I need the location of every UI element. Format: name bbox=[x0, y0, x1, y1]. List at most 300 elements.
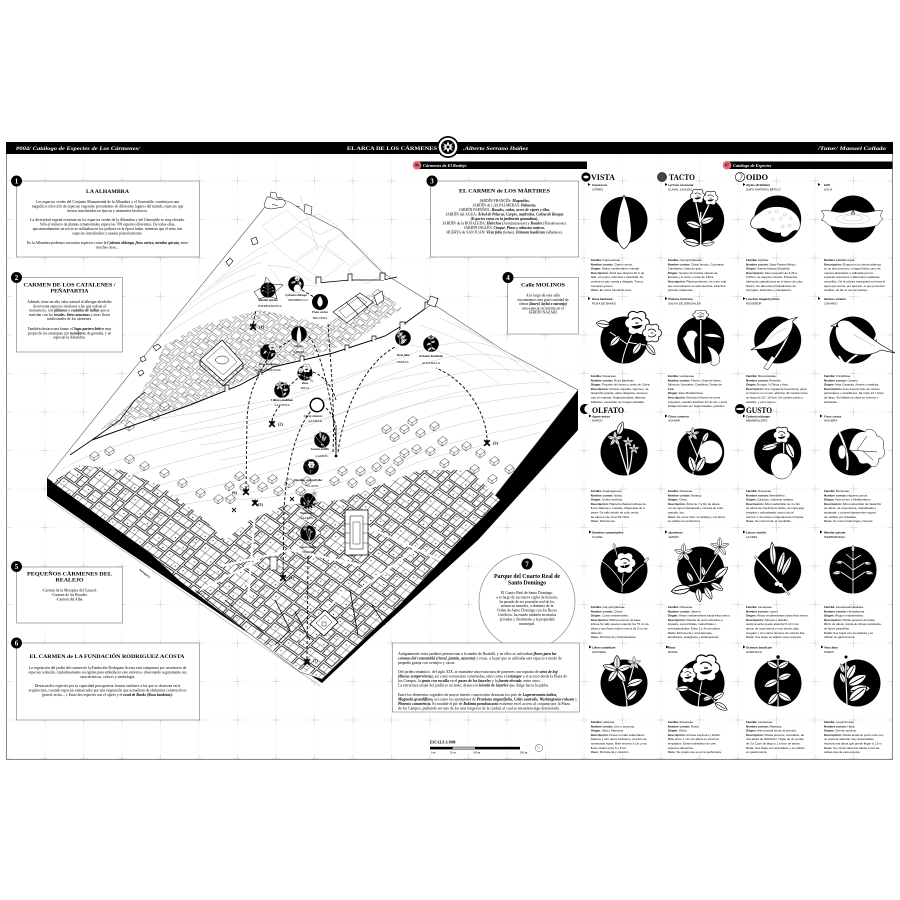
map location markers: (2) bbox=[278, 422, 283, 426]
species card: Agave amica: Nombre común: Nardo. bbox=[591, 493, 623, 497]
species card: Lilium candidum: Usos: Perfumería y curación. bbox=[591, 750, 629, 754]
panel 5: Pequeños cármenes del Realejo: PEQUEÑOS CÁRMENES DEL bbox=[27, 570, 113, 578]
species card: Rosa: especies diferentes. bbox=[668, 746, 694, 750]
species card: Agave amica: flores blancas o rosadas, dispuestas de a bbox=[591, 506, 645, 510]
species card: Rosa banksiae bbox=[588, 297, 661, 404]
panel 4: Calle Molinos: JARDÍN NAZARÍ. bbox=[528, 310, 558, 315]
map species labels: LAUREL bbox=[315, 454, 329, 458]
species card: Agave amica bbox=[589, 414, 648, 523]
species card: Rosa: Nombre común: Rosal. bbox=[668, 724, 700, 728]
landmark buildings in the Realejo bbox=[270, 510, 368, 636]
scale bar: ESCALA 1:1000 bbox=[430, 740, 456, 744]
species card: Mentha spicata: de flores pequeñas. bbox=[824, 626, 850, 630]
map species labels: Dianthus caryophyllus bbox=[293, 478, 323, 482]
panel 1: La Alhambra bbox=[11, 176, 200, 257]
species card: Lilium candidum bbox=[589, 646, 648, 754]
panel 4: Calle Molinos bbox=[502, 272, 579, 334]
species card: Lychnis coronaria: Origen: Género de hierbas nativas de bbox=[668, 271, 718, 275]
heading: Gusto bbox=[735, 404, 772, 415]
species card: Ficus carica bbox=[820, 414, 885, 523]
species card: Luscinia megarhynchos: el invierno en el cent. africano. El ruiseñor tiene bbox=[746, 391, 808, 395]
map species labels: Cydonia oblonga bbox=[285, 293, 307, 297]
species card: Cydonia oblonga: retorcer y de ramas en ligeramente tortuosa. bbox=[746, 515, 804, 519]
panel 3: El Carmen de los Mártires: JARDÍN de LAS PALMERAS: Palmeras. bbox=[473, 202, 537, 208]
heading: Oido bbox=[735, 172, 768, 182]
species card: Serinus canaria: Familia: Fringillidae. bbox=[824, 374, 851, 378]
species card: Alytes dickhilleni: Nombre común: Sapo Partero Bético. bbox=[746, 262, 797, 266]
tutor: /Tutor/ Manuel Collado bbox=[817, 146, 886, 152]
species card: Ficus carica: Usos: Se come frutas higos y brevas. bbox=[824, 519, 873, 523]
heading: Oido: OIDO bbox=[746, 172, 768, 182]
species card: Laurus nobilis: Familia: Lauraceae. bbox=[746, 605, 773, 609]
species card: Serinus canaria: de largo. Su hábitat se ubica en huertos y bbox=[824, 396, 879, 400]
icon: hierbabuena bbox=[254, 277, 283, 299]
map species labels: NARDO bbox=[302, 550, 314, 554]
panel 1: La Alhambra: La diversidad vegetal existente en los espacios verdes de la Alhambra y del Generalife es muy elevada. bbox=[30, 218, 185, 222]
species card: Cupressus: Nombre común: Ciprés común. bbox=[591, 262, 633, 266]
panel 2: Carmen de los Catalenes: monasterio, con plátanos o castaños de indias que se bbox=[29, 309, 110, 314]
text panel: history of the gardens: Phoenix canariensis. Es notable el pie de Robinia pseudoacacia existente en el acceso al conjunto por la Plaza bbox=[398, 702, 570, 706]
species card: Rosa: Descripción: Arbusto espinoso y florido. bbox=[668, 733, 721, 737]
species card: Cydonia oblonga: Usos: Se come fruta: el membrillo. bbox=[746, 519, 792, 523]
species card: Rosa: Familia: Rosaceae. bbox=[668, 720, 694, 724]
species card: Cupressus: Origen: Nativo mediterráneo oriental. bbox=[591, 267, 640, 271]
species card: Rosa banksiae: Origen: Procede del centro y oeste de China. bbox=[591, 383, 650, 387]
panel 2: Carmen de los Catalenes: 2 bbox=[15, 274, 19, 282]
panel 5: Pequeños cármenes del Realejo: -Carmen de los Rosales. bbox=[51, 593, 88, 597]
species card: Cupressus: Cupressus bbox=[592, 183, 608, 187]
species card: Ficus carica: achatada, y corteza ligeramente rugosa bbox=[824, 510, 876, 514]
species card: Citrus sinensis bbox=[665, 414, 726, 523]
species card: Agave amica: NARDO bbox=[592, 418, 603, 422]
species card: Jasminum: Familia: Oleaceae. bbox=[668, 605, 693, 609]
species card: Serinus canaria: arboledas. bbox=[824, 400, 838, 404]
icon: azucena bbox=[274, 381, 290, 399]
species card: Phlomis fruticosa: Nombre común: Flomis, Oreja de liebre, bbox=[668, 378, 722, 382]
panel 6: Fundación Rodríguez Acosta: especies reducido, cuidadosamente escogidas para embellecer este universo, observando seguramente sus bbox=[28, 670, 187, 676]
species card: Citrus sinensis: con la copa redondeada y corteza de color bbox=[668, 506, 723, 510]
species card: H2O water: agua que suena, por ejemplo, el que provocan bbox=[824, 284, 885, 288]
map species labels: Agave amica bbox=[299, 545, 317, 549]
species card: Jasminum bbox=[665, 530, 731, 639]
species card: Phlomis fruticosa bbox=[665, 297, 728, 408]
map species labels: MEMBRILLO bbox=[288, 298, 309, 302]
species card: Ocimum basilicum: Origen: Asia tropical (zona de persas). bbox=[746, 729, 797, 733]
species card: Cupressus: CIPRÉS bbox=[592, 186, 603, 191]
map surface bbox=[47, 197, 578, 679]
species card: Phlomis fruticosa: SALVIA DE JERUSALÉN bbox=[668, 300, 701, 306]
map species labels bbox=[255, 293, 444, 554]
species card: Cydonia oblonga bbox=[743, 414, 804, 523]
species card: Cydonia oblonga: Origen: Cáucaso, sudoeste asiático. bbox=[746, 498, 794, 502]
author: .Alberto Serrano Ibáñez bbox=[463, 146, 529, 152]
species card: Vicia faba bbox=[821, 646, 884, 754]
species card: Ocimum basilicum: Familia: Lamiaceae. bbox=[746, 720, 773, 724]
species card: Vicia faba: Familia: Leguminosae. bbox=[824, 720, 855, 724]
species card: Cydonia oblonga: de altura de crecimiento tardío, de copa algo bbox=[746, 506, 804, 510]
species card: Cupressus: Usos: En setos formando seos. bbox=[591, 288, 632, 292]
species card: Laurus nobilis bbox=[743, 530, 809, 639]
map species labels: Vicia faba bbox=[397, 353, 410, 357]
map location markers: (7) bbox=[313, 658, 318, 663]
species card: Serinus canaria: Origen: Islas Canarias, Azores y madeira. bbox=[824, 383, 879, 387]
scattered houses bbox=[90, 402, 514, 504]
species card: Rosa banksiae: Familia: Rosaceae. bbox=[591, 374, 617, 378]
species card: Rosa: Rosa bbox=[668, 646, 676, 650]
species card: Lychnis coronaria: Familia: Caryophyllaceae. bbox=[668, 258, 703, 262]
icon: azahar bbox=[310, 398, 324, 412]
text panel: history of the gardens: Del jardín romántico, del siglo XIX, se mantiene una estructura de parterres con topiaria de setos de boj bbox=[398, 670, 559, 675]
species card: Jasminum: semicaducifolias. Entre 2 y 4m de altura. bbox=[668, 626, 721, 630]
species card: Lilium candidum: Lilium candidum bbox=[592, 646, 616, 650]
panel 2: Carmen de los Catalenes: PEÑAPARTIA bbox=[50, 286, 89, 294]
species card: Mentha spicata: HIERBABUENA bbox=[824, 535, 845, 539]
map species labels: Cipres. bbox=[294, 344, 304, 348]
panel 1: La Alhambra: Los espacios verdes del Conjunto Monumental de la Alhambra y el Generalife, constituyen una bbox=[36, 200, 179, 205]
panel 2: Carmen de los Catalenes: CARMEN DE LOS CATALENES / bbox=[24, 282, 116, 288]
species card: Mentha spicata: Nombre común: Hierbabuena. bbox=[824, 609, 865, 613]
species card: Citrus sinensis: Usos: Se come fruto: la naranja y sus flores bbox=[668, 515, 726, 519]
panel 6: Fundación Rodríguez Acosta: características, colores y simbología. bbox=[80, 675, 135, 680]
panel 3: El Carmen de los Mártires: HUERTA de SAN JUAN: Vicia faba (habas), Ocimum basilicum (albahaca). bbox=[446, 230, 563, 236]
species card: Cupressus bbox=[588, 183, 648, 292]
species card: Mentha spicata: Mentha spicata bbox=[824, 530, 846, 534]
species card: Mentha spicata: 80cm de altura, propia de climas templados, bbox=[824, 622, 882, 626]
species card: Serinus canaria: Nombre común: Canario. bbox=[824, 378, 859, 382]
species card: Cydonia oblonga: Descripción: Árbol caducifolio de 4 a 6m bbox=[746, 502, 801, 506]
species card: Alytes dickhilleni: Descripción: Sapo pequeño de 3,26 a bbox=[746, 271, 797, 275]
species card: Rosa: Origen: África. bbox=[668, 729, 687, 733]
panel 5: Pequeños cármenes del Realejo: 5 bbox=[15, 563, 19, 571]
species card: Rosa banksiae: Rosa banksiae bbox=[592, 297, 613, 301]
Generalife buildings texture bbox=[326, 288, 402, 346]
species card: Phlomis fruticosa: Descripción: Arbustos leñosos de porte bbox=[668, 396, 721, 400]
species card: Alytes dickhilleni: Origen: Sierras béticas (España). bbox=[746, 267, 790, 271]
species card: Cupressus: talla, con porte columnar o piramidal. Su bbox=[591, 275, 644, 279]
species card: Ficus carica: de múltiple por rebutada. bbox=[824, 515, 857, 519]
map: axonometric view of the Alhambra and Realejo bbox=[47, 192, 578, 686]
species card: Jasminum: JAZMÍN bbox=[668, 535, 679, 539]
species card: Luscinia megarhynchos: Origen: Europa, N.Ofrica y Asia. bbox=[746, 383, 789, 387]
species card: Dianthus caryophyllus: Descripción: Planta perenne de base bbox=[591, 618, 641, 622]
species card: Lychnis coronaria: Descripción: Planta perennes, de corto vida bbox=[668, 280, 727, 284]
panel 6: Fundación Rodríguez Acosta: Destacan dos especies por su capacidad para generar formas similares a las que se observan en la bbox=[35, 684, 181, 688]
species card: Alytes dickhilleni: hormigas, arácnidos y coleópteros. bbox=[746, 288, 792, 292]
species card: Mentha spicata: Origen: Región mediterránea. bbox=[824, 614, 864, 618]
panel 2: Carmen de los Catalenes: propio de los estanques con nenúfares de granada, y en bbox=[28, 331, 111, 336]
Generalife palace bbox=[333, 291, 384, 323]
map species labels: HIGUERA bbox=[313, 316, 328, 320]
species card: Rosa: templados. Existen alrededor de cien bbox=[668, 742, 716, 746]
species card: Ocimum basilicum: ALBAHACA bbox=[746, 650, 762, 654]
panel 1: La Alhambra: muchas otras... bbox=[96, 246, 119, 250]
species card: H2O water: manera abundante y callmada por los bbox=[824, 271, 874, 275]
section bar 06 bbox=[413, 161, 587, 170]
heading: Vista: VISTA bbox=[591, 172, 616, 182]
icon: north arrow bbox=[535, 744, 543, 752]
icon: habas bbox=[395, 329, 411, 347]
species card: Rosa banksiae: Nombre común: Rosa Banksiae. bbox=[591, 378, 635, 382]
species card: Luscinia megarhynchos: un largo de 15 / 16,5cm. De colores pardo y bbox=[746, 396, 804, 400]
panel 7: Parque del Cuarto Real de Santo Domingo: Católicos, ha estado también en manos bbox=[498, 613, 557, 618]
species card: Alytes dickhilleni bbox=[743, 183, 803, 292]
species card: Laurus nobilis: Descripción: Árbusto o árbolito bbox=[746, 618, 788, 622]
species card: Alytes dickhilleni: Familia: Alytidae. bbox=[746, 258, 769, 262]
species card: Rosa: Mide entre 1 / 2m de altura en entornos bbox=[668, 737, 720, 741]
text panel: history of the gardens: coronas del consumirlá (clavel, jazmín, azucena) y rosas, a la par que se utilizaba este espacio a modo de bbox=[398, 656, 562, 662]
text panel: history of the gardens: (Buxus sempervirens), así como estructuras construidas, tales como el estanque o el acceso desde la Plaza de bbox=[398, 674, 567, 680]
black terrain wedges bbox=[47, 390, 578, 683]
species card: Lilium candidum: Origen: Siria y Palestina. bbox=[591, 729, 624, 733]
species card: Ocimum basilicum: en gastronomía. bbox=[746, 750, 767, 754]
species card: Citrus sinensis: Familia: Rutaceae. bbox=[668, 489, 693, 493]
species card: Cupressus: Descripción: Árbol que alcanza 30 m de bbox=[591, 271, 645, 275]
text panel: history of the gardens: Entre los elementos vegetales de mayor interés conservados destacan los pies de Lagerstroemia indica, bbox=[398, 693, 557, 697]
icon: rosa bbox=[297, 364, 314, 382]
species card: Luscinia megarhynchos: RUISEÑOR bbox=[746, 300, 762, 306]
species card: H2O water: sonidos, de ahí el uso de fuentes. bbox=[824, 288, 868, 292]
map species labels: HABAS bbox=[397, 360, 409, 364]
species card: Cydonia oblonga: irregular y redondeada; tronco tort al bbox=[746, 510, 794, 514]
icon: nardo bbox=[296, 522, 321, 543]
panel 7: Parque del Cuarto Real de Santo Domingo: a lo largo de sus nueve siglos de historia, bbox=[496, 595, 558, 600]
icon: laurel bbox=[314, 431, 330, 448]
panel 3: El Carmen de los Mártires: (Especies raras en la jardinería granadina). bbox=[471, 217, 538, 221]
section bar 06: Cármenes de El Realejo bbox=[423, 163, 467, 168]
heading: Olfato: OLFATO bbox=[592, 405, 624, 415]
panel 2: Carmen de los Catalenes: de noventa especies similares a las que rodean el bbox=[33, 304, 106, 308]
species card: Dianthus caryophyllus: Familia: Caryophyllaceae. bbox=[591, 605, 626, 609]
species card: Agave amica: Descripción: Planta herbácea bulbosa de bbox=[591, 502, 646, 506]
text panel: history of the gardens: de los Campos, pudiendo ser uno de los más longevos de la ciudad, el cual se encuentra algo deteriorado. bbox=[398, 706, 560, 712]
species card: Citrus sinensis: Nombre común: Naranjo. bbox=[668, 493, 702, 497]
map species labels: Rosa banksiae bbox=[259, 362, 278, 366]
heading: Olfato bbox=[580, 404, 624, 415]
panel 6: Fundación Rodríguez Acosta: (pared, techo,...). Estas dos especies son el ciprés y el rosal de Banks (Rosa banksiae). bbox=[42, 693, 173, 698]
species card: Vicia faba: vainas que de esta especie. bbox=[824, 750, 861, 754]
species card: Lilium candidum: Nombre común: Lirio o azucena. bbox=[591, 724, 635, 728]
panel 4: Calle Molinos: 4 bbox=[506, 274, 510, 282]
species card: Jasminum: afrodisíaca, analgésica y antidepresiva. bbox=[668, 635, 719, 639]
panel 7: Parque del Cuarto Real de Santo Domingo: Parque del Cuarto Real de bbox=[494, 574, 560, 580]
species card: Ocimum basilicum: Descripción: Planta perenne, aromática, de bbox=[746, 733, 804, 737]
species card: Lilium candidum: Familia: Liliaceae. bbox=[591, 720, 615, 724]
species card: Ocimum basilicum: Ocimum basilicum bbox=[746, 646, 773, 650]
heading: Tacto bbox=[657, 172, 695, 182]
species card: Agave amica: Usos: Perfumería. bbox=[591, 519, 615, 523]
species card: Jasminum: Jasminum bbox=[668, 530, 683, 534]
species card: Luscinia megarhynchos: Familia: Muscicapidae. bbox=[746, 374, 777, 378]
species card: Lychnis coronaria: Lychnis coronaria bbox=[668, 183, 694, 187]
species card: Lychnis coronaria: Candelaria, Oreja de gato. bbox=[668, 267, 702, 271]
scale bar: 100 m bbox=[473, 750, 481, 754]
species card: Ficus carica: Familia: Moraceae. bbox=[824, 489, 850, 493]
panel 6: Fundación Rodríguez Acosta bbox=[11, 638, 200, 720]
species card: Lilium candidum: bulboso y otro aéreo herbáceo, provisto de bbox=[591, 737, 647, 741]
species card: Luscinia megarhynchos: Nombre común: Ruiseñor. bbox=[746, 378, 782, 382]
species card: Citrus sinensis: castaño, liso. bbox=[668, 510, 685, 514]
species card: Lychnis coronaria: para las mariposas. bbox=[668, 288, 694, 292]
species card: Serinus canaria: particulares y amarillosos. De entre 10 / 12cm bbox=[824, 391, 884, 395]
species card: Jasminum: Nombre común: Jazmín. bbox=[668, 609, 702, 613]
species card: Vicia faba: Usos: Se comen tanto las habas como las bbox=[824, 746, 880, 750]
species card: Cupressus: Familia: Cupresáceae bbox=[591, 258, 620, 262]
icon: albahaca bbox=[423, 335, 439, 353]
species card: Agave amica: Se atura es de unos 60-70cm. bbox=[591, 515, 630, 519]
map species labels: Citrus sinensis bbox=[304, 414, 323, 418]
species card: Rosa banksiae: Descripción: Arbusto trepador, vigoroso, de bbox=[591, 387, 649, 391]
species card: Dianthus caryophyllus bbox=[589, 530, 650, 639]
species card: Lilium candidum: flores miden entre 5 y 8 cm. bbox=[591, 746, 627, 750]
map location markers bbox=[232, 324, 498, 665]
icon: higuera bbox=[312, 294, 328, 310]
text panel: history of the gardens: Magnolia grandiflora, así como los ejemplares de Prunistas angustifolia, Celtis australis, Washingtonia robusta y bbox=[397, 698, 577, 702]
panel 2: Carmen de los Catalenes: También destaca una fauna: el Sapo partero bético muy bbox=[28, 327, 112, 331]
heading: Gusto: GUSTO bbox=[746, 405, 772, 415]
species card: Rosa banksiae: brillantes, estrechas, de margen dentado. bbox=[591, 400, 645, 404]
species card: H2O water: H2O bbox=[824, 183, 831, 187]
Alhambra precinct buildings texture bbox=[100, 310, 345, 430]
species card: Lilium candidum: numerosas hojas. Mide entorno a 1m y sus bbox=[591, 742, 647, 746]
species card: Vicia faba: Nombre común: Haba. bbox=[824, 724, 855, 728]
panel 3: El Carmen de los Mártires: JARDÍN INGLÉS: Cinqué, Pinos y arbustos nativos. bbox=[464, 225, 545, 230]
panel 4: Calle Molinos: olmos (laurel, laylai e naranjo) bbox=[519, 302, 568, 306]
species card: Cydonia oblonga: Nombre común: Membrillero. bbox=[746, 493, 786, 497]
species card: Rosa banksiae: ROSA DE BANKS bbox=[592, 302, 616, 306]
panel 1: La Alhambra: 1 bbox=[15, 178, 19, 186]
species card: Dianthus caryophyllus: Usos: Perfumería y farmacéuticas. bbox=[591, 635, 637, 639]
species card: Rosa bbox=[666, 646, 729, 754]
map species labels: ALBAHACA bbox=[422, 361, 441, 365]
junction line and dot bbox=[335, 425, 337, 456]
Palace of Charles V bbox=[200, 340, 243, 386]
species card: H2O water: canchillos. De la cultura (mezquita) se forma el bbox=[824, 280, 885, 284]
panel 6: Fundación Rodríguez Acosta: La vegetación del jardín del carmen de la Fundación Rodríguez Acosta está compuesta por un número de bbox=[29, 666, 187, 670]
panel 4: Calle Molinos: una especie recurrente en el bbox=[522, 306, 564, 310]
map species labels: Laurus nobilis bbox=[310, 447, 330, 451]
species card: Vicia faba: HABAS bbox=[824, 650, 834, 654]
species card: Luscinia megarhynchos bbox=[743, 297, 808, 404]
city blocks texture bbox=[52, 465, 500, 678]
species card: Vicia faba: Vicia faba bbox=[824, 646, 838, 650]
scale bar: 0 m bbox=[431, 750, 436, 754]
species card: Alytes dickhilleni: SAPO PARTERO BÉTICO bbox=[746, 186, 781, 191]
species card: Laurus nobilis: Nombre común: Laurel. bbox=[746, 609, 779, 613]
panel 2: Carmen de los Catalenes bbox=[11, 272, 122, 352]
text panel: history of the gardens: La estructura actual del jardín es reciente, destaca la bóveda de laureles que dirige hacia la qubba. bbox=[398, 684, 549, 688]
map species labels: Rosa bbox=[302, 381, 309, 385]
species card: Phlomis fruticosa: Phlomis fruticosa bbox=[668, 297, 693, 301]
map species labels: Ocimum basilicum bbox=[419, 354, 444, 358]
panel 7: Parque del Cuarto Real de Santo Domingo: monarcas nazaríes, a dominio de la bbox=[501, 604, 554, 609]
species card: Mentha spicata bbox=[820, 530, 882, 639]
map location markers: (1) bbox=[259, 324, 264, 330]
scale bar: 200 m bbox=[520, 750, 528, 754]
species card: Ocimum basilicum: Usos: Sus hojas son aromáticas y se utilizan bbox=[746, 746, 805, 750]
text panel: history of the gardens bbox=[392, 643, 579, 712]
species card: Luscinia megarhynchos: castaño, y pico negros. bbox=[746, 400, 776, 404]
species card: Lychnis coronaria: Nombre común: Clavel lanudo, Coronaria, bbox=[668, 262, 724, 266]
species card: Cupressus: cuespían grueso. bbox=[591, 284, 613, 288]
species card: Dianthus caryophyllus: Dianthus caryophyllus bbox=[592, 530, 624, 534]
species card: Dianthus caryophyllus: Origen: Costa mediterránea. bbox=[591, 614, 629, 618]
panel 7: Parque del Cuarto Real de Santo Domingo: 7 bbox=[525, 560, 529, 568]
map species labels: Ficus carica bbox=[312, 310, 328, 314]
species card: Mentha spicata: Familia: Lamiaceae/Labiadas. bbox=[824, 605, 864, 609]
species card: Mentha spicata: Descripción: Planta perenne de hasta bbox=[824, 618, 875, 622]
panel 2: Carmen de los Catalenes: Además, tiene un alto valor natural al albergar alrededor bbox=[27, 300, 113, 305]
icon: jazmín bbox=[298, 490, 318, 512]
map species labels: CIPRES bbox=[293, 350, 305, 354]
species card: Citrus sinensis: AZAHAR bbox=[668, 418, 680, 422]
icon: ciprés bbox=[291, 326, 307, 344]
species card: Alytes dickhilleni: Alytes dickhilleni bbox=[745, 183, 770, 187]
section bar 07: Catálogo de Especies bbox=[733, 163, 772, 168]
panel 7: Parque del Cuarto Real de Santo Domingo bbox=[479, 554, 575, 650]
map species labels: ROSA BANKSIAE bbox=[255, 368, 281, 372]
species card: Lilium candidum: Descripción: Posee un tallo subterráneo bbox=[591, 733, 645, 737]
species card: Ocimum basilicum: de 3 a 11cm de largo y 1 a 6cm de ancho. bbox=[746, 742, 801, 746]
panel 3: El Carmen de los Mártires: EL CARMEN de LOS MÁRTIRES bbox=[459, 186, 550, 194]
species card: Mentha spicata: utilizan en gastronomía. bbox=[824, 635, 855, 639]
panel 7: Parque del Cuarto Real de Santo Domingo: municipal. bbox=[519, 622, 535, 626]
species card: Laurus nobilis: siempreverde puede alcanzar 5-10 m de bbox=[746, 622, 799, 626]
panel 5: Pequeños cármenes del Realejo: REALEJO bbox=[56, 578, 84, 584]
species card: Citrus sinensis: Descripción: Árbol de 7 a 8m de altura, bbox=[668, 502, 720, 506]
header bar bbox=[6, 136, 893, 158]
species card: Citrus sinensis: se utilizan en perfumería. bbox=[668, 519, 701, 523]
species card: H2O water bbox=[818, 183, 885, 292]
species card: Lychnis coronaria: Eurasia y el norte y oeste de África. bbox=[668, 275, 714, 279]
panel 4: Calle Molinos: encontramos una gran cantidad de bbox=[517, 298, 569, 302]
species card: Vicia faba: Origen: Oriente próximo. bbox=[824, 729, 857, 733]
panel 1: La Alhambra: En la Alhambra podemos encontrar especies como la Cydonia oblonga, ficus carica, mentha spicata, entre bbox=[27, 241, 189, 245]
panel 6: Fundación Rodríguez Acosta: arquitectura, creando espacios enmarcados por una vegetación que actualizan de elementos constructivos bbox=[29, 688, 187, 694]
icon: clavel bbox=[303, 458, 319, 475]
species card: Dianthus caryophyllus: leñosa Su tallo pueden superar los 75 cm de bbox=[591, 622, 649, 626]
species card: Citrus sinensis: Citrus sinensis bbox=[668, 414, 689, 418]
panel 6: Fundación Rodríguez Acosta: EL CARMEN de LA FUNDACIÓN RODRIGUEZ ACOSTA bbox=[30, 652, 185, 660]
species card: Agave amica: Origen: Centro américa. bbox=[591, 498, 623, 502]
species card: Phlomis fruticosa: Familia: Lamiáceae. bbox=[668, 374, 695, 378]
species card: Ficus carica: Descripción: Árbol caducifolio de hasta 8m bbox=[824, 502, 882, 506]
species card: Citrus sinensis: Origen: China. bbox=[668, 498, 688, 502]
section bar 07: 07 bbox=[725, 164, 729, 168]
species card: Laurus nobilis: LAUREL bbox=[746, 535, 758, 539]
dashed routes from sites to species bbox=[246, 290, 487, 659]
species card: Laurus nobilis: irregular y con varios tiempos de corteza lisa. bbox=[746, 631, 805, 635]
text panel: history of the gardens: los Campos, la gruta con rocalla en el paseo de los laureles y la fuente elevada, entre otros. bbox=[398, 679, 541, 684]
species card: Alytes dickhilleni: 5,05cm, de aspecto robusto. Presentas bbox=[746, 275, 798, 279]
species card: Dianthus caryophyllus: CLAVEL bbox=[592, 535, 603, 539]
species card: Laurus nobilis: Laurus nobilis bbox=[746, 530, 766, 534]
species card: Vicia faba: Descripción: Planta anual de porte recto con bbox=[824, 733, 884, 737]
category headings bbox=[580, 172, 772, 415]
street label on terrain edge: Antequera bbox=[138, 568, 152, 579]
panel 3: El Carmen de los Mártires: JARDÍN de la ROSALEDA: Helechos (Aranjuezaceae) y Rosales (Kinsaleaceae). bbox=[442, 220, 567, 226]
species card: Laurus nobilis: Origen: Áreas mediterráneas hasta Asia menor. bbox=[746, 614, 809, 618]
species card: Mentha spicata: Fruto: Sus hojas son aromáticas y se bbox=[824, 631, 874, 635]
species card: H2O water: Nombre común: Agua. bbox=[824, 258, 855, 262]
map species labels: HIERBABUENA bbox=[258, 304, 282, 308]
species card: Agave amica: Familia: Asparagaceae. bbox=[591, 489, 622, 493]
icon: rosa banksiae bbox=[259, 343, 280, 360]
species card: Serinus canaria: CANARIO bbox=[824, 302, 838, 306]
fortress towers at the top of the hill bbox=[264, 192, 312, 215]
map species labels: JAZMÍN bbox=[301, 515, 314, 520]
panel 1: La Alhambra: LA ALHAMBRA bbox=[86, 189, 129, 195]
map species labels: Mentha spicata bbox=[257, 298, 278, 302]
